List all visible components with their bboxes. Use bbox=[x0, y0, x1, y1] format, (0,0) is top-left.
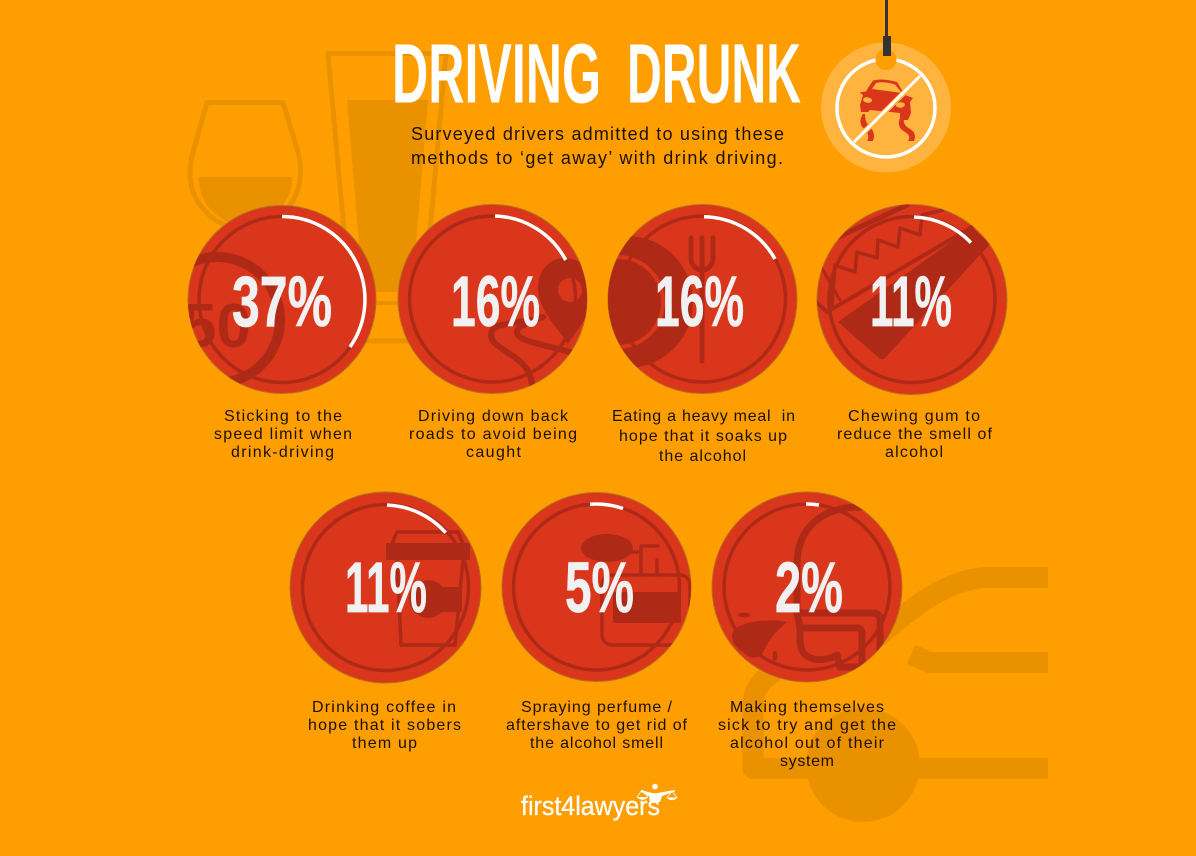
caption: coffee bbox=[308, 699, 461, 752]
caption: coffee: Drinking coffee in bbox=[312, 699, 456, 716]
panel: 37% speed limit: 37% bbox=[232, 263, 332, 342]
title: DRUNK bbox=[627, 26, 801, 120]
panel: 5% perfume bbox=[502, 492, 691, 682]
icon: speedometer: 50 bbox=[182, 292, 251, 361]
caption: coffee: hope that it sobers bbox=[308, 717, 461, 734]
caption: perfume: aftershave to get rid of bbox=[506, 717, 688, 734]
caption: perfume: Spraying perfume / bbox=[521, 699, 673, 716]
caption: back roads: roads to avoid being bbox=[409, 426, 577, 443]
icon: person being sick over toilet bbox=[732, 507, 880, 667]
caption: being sick: system bbox=[780, 753, 834, 770]
subtitle text: Surveyed drivers admitted to using these bbox=[411, 124, 784, 144]
panel: 2% being sick: 2% bbox=[775, 549, 843, 628]
caption: speed limit: speed limit when bbox=[214, 426, 352, 443]
caption: perfume: the alcohol smell bbox=[530, 735, 663, 752]
icon: plate and fork bbox=[608, 236, 716, 368]
caption: back roads bbox=[409, 408, 577, 461]
background icon: wine glass bbox=[190, 102, 301, 229]
panel: 16% heavy meal: 16% bbox=[655, 263, 744, 342]
caption: heavy meal: Eating a heavy meal in bbox=[612, 408, 795, 425]
caption: heavy meal: the alcohol bbox=[659, 448, 746, 465]
panel: 5% perfume: 5% bbox=[565, 549, 634, 628]
caption: being sick: Making themselves bbox=[730, 699, 884, 716]
subtitle text: methods to ‘get away’ with drink driving. bbox=[411, 148, 783, 168]
caption: speed limit: drink-driving bbox=[231, 444, 334, 461]
caption: back roads: Driving down back bbox=[418, 408, 569, 425]
caption: chewing gum: Chewing gum to bbox=[848, 408, 980, 425]
panel: 2% being sick bbox=[712, 492, 902, 682]
icon: coffee cup bbox=[386, 532, 470, 645]
subtitle text bbox=[411, 124, 784, 168]
panel: 16% heavy meal bbox=[608, 204, 798, 394]
icon: speedometer bbox=[188, 252, 285, 384]
caption: perfume bbox=[506, 699, 688, 752]
caption: being sick bbox=[718, 699, 896, 770]
caption: coffee: them up bbox=[352, 735, 417, 752]
panel: 11% chewing gum: 11% bbox=[870, 263, 952, 342]
caption: heavy meal: hope that it soaks up bbox=[619, 428, 787, 445]
panel: 11% coffee: 11% bbox=[345, 549, 427, 628]
panel: 16% back roads bbox=[398, 204, 596, 394]
title: DRIVING bbox=[392, 26, 601, 120]
caption: speed limit: Sticking to the bbox=[224, 408, 342, 425]
caption: chewing gum: alcohol bbox=[885, 444, 943, 461]
caption: heavy meal bbox=[612, 408, 795, 465]
background icon: car bbox=[753, 578, 1048, 822]
icon: figure holding scales bbox=[636, 784, 678, 802]
panel: 16% back roads: 16% bbox=[451, 263, 540, 342]
logo: first4lawyers: first4lawyers bbox=[521, 791, 660, 821]
icon: chewing gum stick bbox=[812, 200, 990, 360]
background icon: pint glass bbox=[328, 54, 446, 341]
caption: chewing gum: reduce the smell of bbox=[837, 426, 993, 443]
caption: being sick: sick to try and get the bbox=[718, 717, 896, 734]
panel: 11% chewing gum bbox=[812, 200, 1007, 394]
icon: perfume bottle bbox=[581, 534, 690, 645]
caption: back roads: caught bbox=[466, 444, 522, 461]
caption: being sick: alcohol out of their bbox=[730, 735, 885, 752]
caption: chewing gum bbox=[837, 408, 993, 461]
caption: speed limit bbox=[214, 408, 352, 461]
panel: 11% coffee bbox=[290, 492, 481, 683]
panel: 37% speed limit bbox=[188, 205, 376, 394]
icon: map pin and road bbox=[491, 258, 596, 392]
icon: hanging no drink-driving sign bbox=[821, 0, 951, 172]
